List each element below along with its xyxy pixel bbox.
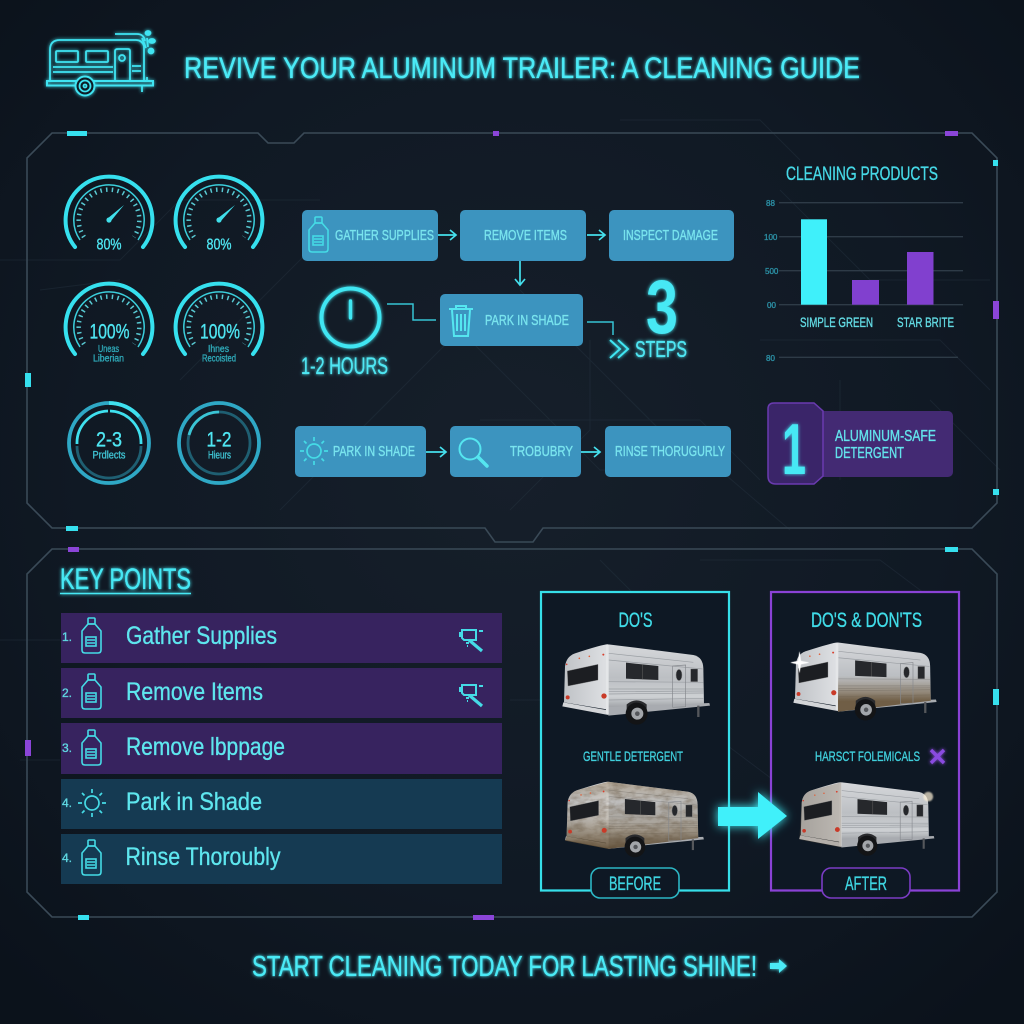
- flow box: park in shade: [440, 294, 583, 346]
- list row 3: [61, 723, 502, 774]
- heading: key points: KEY POINTS: [60, 563, 191, 596]
- gauge: 100% lines: 100%: [90, 320, 130, 344]
- gauge: 80% second: 80%: [206, 236, 232, 254]
- panel: before (do's): GENTLE DETERGENT: [583, 748, 683, 764]
- list row 3: Remove lbppage: [126, 733, 285, 761]
- trailer: partly cleaned: [790, 643, 937, 720]
- panel: before (do's): [541, 592, 729, 898]
- list row 4: 4.: [62, 796, 72, 810]
- bar chart: cleaning products: 88: [766, 199, 775, 208]
- gauge: 80%: [66, 177, 152, 254]
- trailer: clean: [562, 644, 710, 725]
- gauge: 100% lines: Uneas: [98, 344, 119, 355]
- bar chart: cleaning products: 80: [766, 354, 775, 363]
- flow box: gather supplies: [302, 210, 438, 261]
- arrow: thoroughly to rinse: [581, 447, 600, 457]
- flow box: park in shade row 3: [295, 426, 426, 477]
- flow box: gather supplies: GATHER SUPPLIES: [335, 227, 434, 244]
- list row 5: Rinse Thoroubly: [126, 843, 281, 871]
- list row 2: Remove Items: [126, 678, 263, 706]
- flow box: rinse thoroughly: RINSE THORUGURLY: [615, 443, 725, 460]
- button: after: AFTER: [845, 874, 887, 895]
- panel: after (do's and don'ts): HARSCT FOLEMICALS: [815, 748, 920, 764]
- panel: lower frame: [25, 547, 999, 920]
- bar chart: cleaning products: 00: [767, 301, 776, 310]
- gauge: 100% items: Recoisted: [202, 354, 236, 364]
- list row 2: [61, 668, 502, 718]
- gauge: 100% items: 100%: [200, 320, 240, 344]
- callout: aluminum-safe detergent: ALUMINUM-SAFE: [835, 428, 936, 445]
- icon: purple cross: [931, 750, 944, 763]
- dial: 1-2 hours: 1-2: [206, 428, 232, 452]
- button: before: BEFORE: [609, 874, 661, 895]
- arrow: remove to inspect: [587, 230, 605, 240]
- panel: before (do's): DO'S: [618, 609, 652, 632]
- arrow: before to after: [718, 792, 787, 839]
- gauge: 80% second: [176, 177, 262, 254]
- list row 4: Park in Shade: [126, 788, 262, 816]
- steps counter: [610, 265, 687, 362]
- title: REVIVE YOUR ALUMINUM TRAILER: A CLEANING GUIDE: [184, 52, 860, 85]
- flow box: park in shade: PARK IN SHADE: [485, 312, 569, 329]
- flow box: remove items: REMOVE ITEMS: [484, 227, 567, 244]
- panel: after (do's and don'ts): [771, 592, 959, 898]
- call to action: START CLEANING TODAY FOR LASTING SHINE!: [252, 951, 757, 983]
- callout: aluminum-safe detergent: [768, 403, 953, 490]
- dial: 2-3 products: Prdlects: [92, 450, 126, 462]
- flow box: rinse thoroughly: [605, 426, 731, 477]
- list row 1: 1.: [62, 630, 72, 644]
- gauge: 80%: 80%: [96, 236, 122, 254]
- gauge: 100% items: Ihnes: [208, 344, 229, 355]
- arrow: remove to park: [515, 261, 525, 285]
- arrow: park to thoroughly: [426, 447, 446, 457]
- dial: 2-3 products: [69, 403, 149, 483]
- button: after: [822, 868, 910, 898]
- list row 5: 4.: [62, 851, 72, 865]
- clock icon: [322, 288, 380, 346]
- flow box: remove items: [460, 210, 586, 261]
- chart heading: CLEANING PRODUCTS: [786, 164, 938, 185]
- connector: park to steps: [587, 322, 613, 335]
- flow box: thorough: [450, 426, 581, 477]
- callout: aluminum-safe detergent: DETERGENT: [835, 445, 904, 462]
- connector: clock to park: [387, 304, 436, 320]
- steps counter: 3: [646, 265, 678, 350]
- flow box: inspect damage: [609, 210, 734, 261]
- list row 1: [61, 613, 502, 663]
- duration label: 1-2 HOURS: [301, 353, 388, 380]
- callout: aluminum-safe detergent: 1: [782, 410, 806, 490]
- list row 3: 3.: [62, 741, 72, 755]
- bar chart: cleaning products: [764, 199, 963, 363]
- dial: 2-3 products: 2-3: [96, 428, 122, 452]
- dial: 1-2 hours: [179, 403, 259, 483]
- list row 2: 2.: [62, 686, 72, 700]
- flow box: park in shade row 3: PARK IN SHADE: [333, 443, 415, 460]
- steps counter: STEPS: [635, 336, 687, 362]
- arrow: gather to remove: [438, 230, 456, 240]
- panel: after (do's and don'ts): DO'S & DON'TS: [811, 609, 922, 632]
- bar chart: cleaning products: 500: [765, 267, 779, 276]
- panel: overview frame: [25, 131, 999, 542]
- bar chart: cleaning products: SIMPLE GREEN: [800, 314, 873, 330]
- list row 5: [61, 834, 502, 884]
- gauge: 100% lines: Liberian: [93, 354, 124, 364]
- trailer: dirty: [565, 782, 704, 857]
- bar chart: cleaning products: 100: [764, 233, 778, 242]
- bar chart: cleaning products: STAR BRITE: [897, 314, 954, 330]
- list row 1: Gather Supplies: [126, 622, 277, 650]
- dial: 1-2 hours: Hieurs: [208, 450, 231, 462]
- trailer: shiny: [799, 782, 934, 856]
- list row 4: [61, 779, 502, 829]
- button: before: [591, 868, 679, 898]
- header icon: trailer: [47, 31, 155, 96]
- flow box: inspect damage: INSPECT DAMAGE: [623, 227, 718, 244]
- gauge: 100% items: [176, 284, 262, 364]
- gauge: 100% lines: [66, 284, 152, 364]
- flow box: thorough: TROBUBRY: [510, 443, 573, 460]
